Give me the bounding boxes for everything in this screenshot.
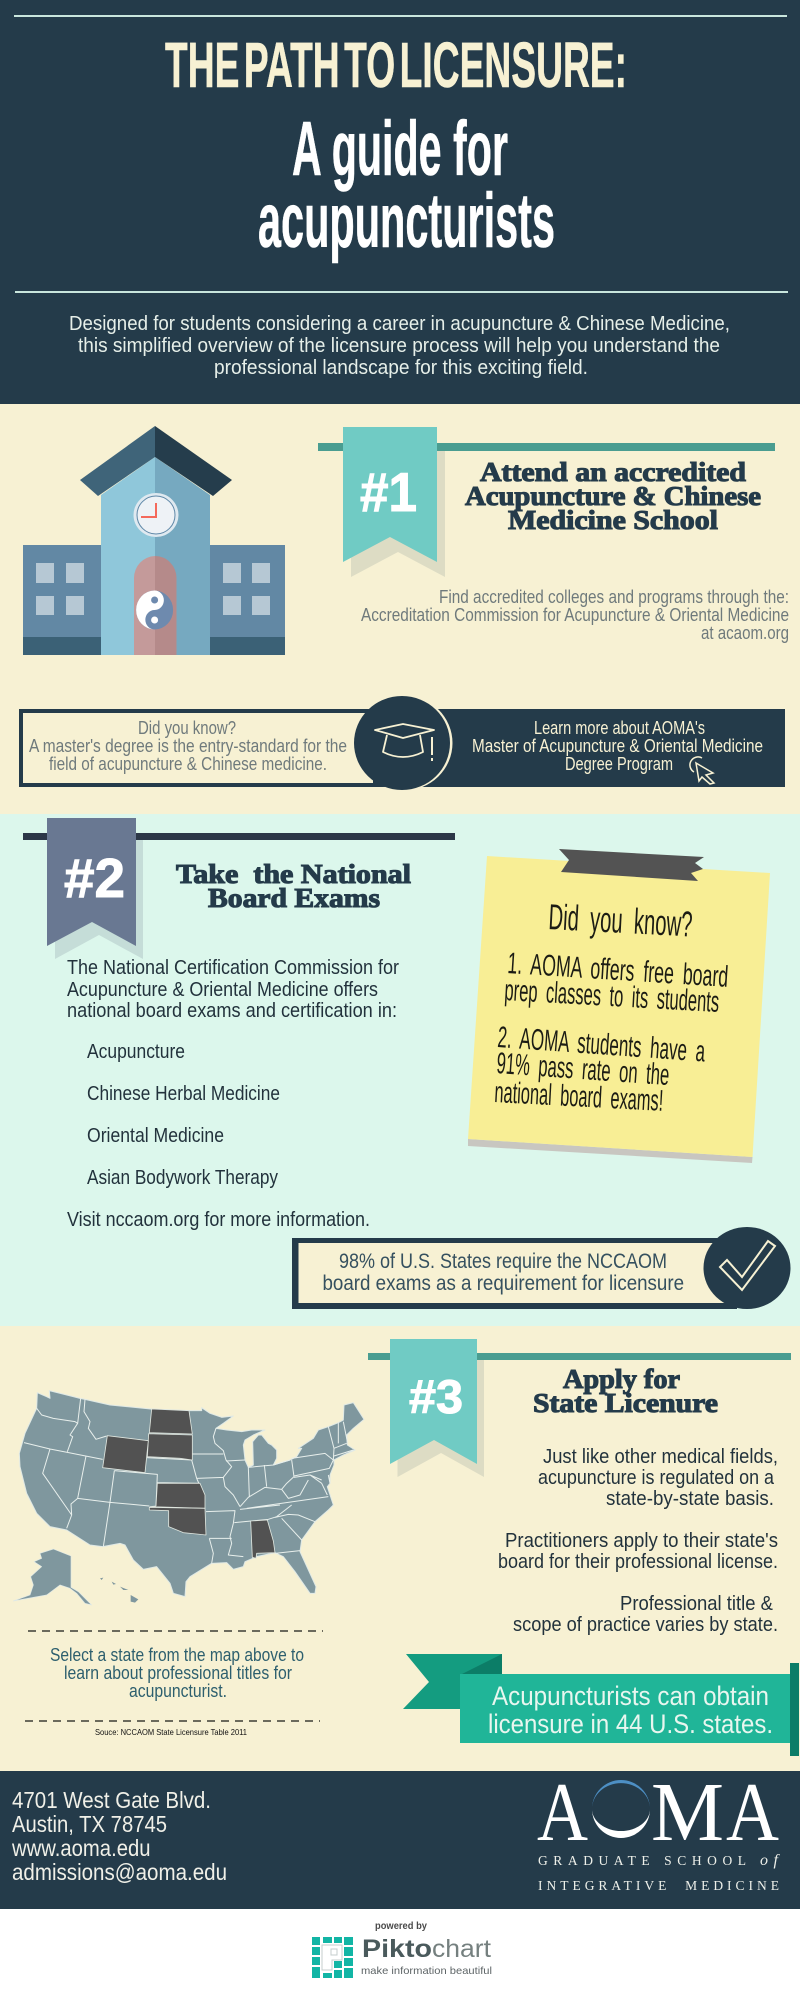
icon: graduation cap: [375, 724, 434, 761]
text: learn more: Learn more about AOMA's: [534, 717, 705, 738]
callout: did you know master's degree: [19, 696, 785, 790]
text: contact details: [11, 1787, 227, 1885]
text: contact details: admissions@aoma.edu: [12, 1859, 227, 1885]
title line 2: A guide for: [292, 106, 508, 192]
heading: step 3: State Licenure: [533, 1388, 718, 1418]
text: contact details: Austin, TX 78745: [12, 1811, 167, 1837]
panel: step 2 exams: [0, 814, 800, 1326]
callout: 98 percent: [292, 1227, 790, 1309]
text: state regulation: Professional title &: [620, 1592, 773, 1615]
handwritten text: [494, 896, 729, 1118]
text: board exams description: The National Certification Commission for: [67, 956, 399, 979]
panel: Piktochart credit: powered by: [375, 1920, 427, 1932]
callout: 98 percent: 98% of U.S. States require the NCCAOM: [339, 1250, 667, 1273]
text: board exams description: Visit nccaom.org for more information.: [67, 1208, 370, 1231]
handwritten text: 91% pass rate on the: [496, 1047, 670, 1092]
panel: footer: [0, 1766, 800, 1909]
text: map instruction: [50, 1644, 304, 1701]
text: learn more: [472, 717, 763, 774]
states highlighted on map: [103, 1409, 275, 1558]
text: state regulation: Practitioners apply to their state's: [505, 1529, 778, 1552]
text: state regulation: Just like other medical fields,: [543, 1445, 778, 1468]
callout: did you know master's degree: Did you know?: [138, 717, 236, 738]
handwritten text: national board exams!: [494, 1076, 664, 1118]
heading: step 2: Board Exams: [208, 883, 380, 913]
ribbon: step 3: [368, 1339, 791, 1477]
icon: cursor: [690, 757, 714, 784]
callout: 98 percent: board exams as a requirement for licensure: [322, 1272, 684, 1295]
icon: check mark: [720, 1241, 775, 1290]
logo: AOMA: GRADUATE SCHOOL of: [538, 1852, 781, 1869]
text: board exams description: Asian Bodywork Therapy: [87, 1166, 279, 1189]
intro text: [69, 312, 730, 379]
ribbon: step 1: [318, 427, 775, 577]
icon: Piktochart logo: [312, 1937, 353, 1978]
ribbon: step 1: #1: [360, 461, 417, 523]
text: board exams description: Chinese Herbal Medicine: [87, 1082, 280, 1105]
panel: step 3 state licensure: [0, 1326, 800, 1771]
heading: step 2: [176, 859, 412, 913]
text: contact details: 4701 West Gate Blvd.: [12, 1787, 211, 1813]
text: board exams description: Acupuncture & Oriental Medicine offers: [67, 978, 378, 1001]
logo: AOMA: INTEGRATIVE MEDICINE: [538, 1878, 779, 1893]
text: state regulation: state-by-state basis.: [606, 1487, 774, 1510]
wordmark: Piktochart: Pikto: [362, 1935, 432, 1963]
text: contact details: www.aoma.edu: [11, 1835, 151, 1861]
intro text: professional landscape for this exciting field.: [214, 356, 588, 379]
heading: step 3: [533, 1364, 718, 1418]
text: state regulation: [498, 1445, 778, 1636]
logo: AOMA: M: [651, 1766, 724, 1859]
title line 3: acupuncturists: [258, 178, 555, 264]
callout: did you know master's degree: field of acupuncture & Chinese medicine.: [49, 753, 327, 774]
wordmark: Piktochart: chart: [432, 1935, 491, 1963]
panel: Piktochart credit: [312, 1920, 492, 1978]
text: map instruction: acupuncturist.: [129, 1680, 227, 1701]
text: board exams description: Oriental Medicine: [87, 1124, 224, 1147]
heading: step 1: Attend an accredited: [480, 457, 746, 487]
banner: 44 states: licensure in 44 U.S. states.: [488, 1709, 773, 1739]
heading: step 3: Apply for: [563, 1364, 680, 1394]
ribbon: step 3: #3: [409, 1370, 463, 1423]
banner: 44 states: Acupuncturists can obtain: [492, 1681, 769, 1711]
banner: 44 states: [403, 1654, 799, 1756]
ribbon: step 2: [23, 818, 455, 959]
heading: step 1: [465, 457, 761, 535]
panel: step 1 school: [0, 404, 800, 814]
text: source: Souce: NCCAOM State Licensure Table 2011: [95, 1727, 247, 1737]
ribbon: step 2: #2: [64, 847, 125, 909]
panel: header: [0, 0, 800, 404]
logo: AOMA: A: [537, 1766, 588, 1859]
text: board exams description: national board exams and certification in:: [67, 999, 397, 1022]
heading: step 1: Acupuncture & Chinese: [465, 481, 761, 511]
wordmark: Piktochart: make information beautiful: [361, 1965, 492, 1977]
heading: step 2: Take the National: [176, 859, 412, 889]
text: map instruction: learn about professional titles for: [64, 1662, 292, 1683]
sticky note: [468, 849, 770, 1163]
heading: step 1: Medicine School: [508, 505, 719, 535]
text: learn more: Degree Program: [565, 753, 673, 774]
text: board exams description: Acupuncture: [87, 1040, 185, 1063]
text: map instruction: Select a state from the map above to: [50, 1644, 304, 1665]
text: board exams description: [67, 956, 399, 1231]
icon: school building: [23, 426, 285, 655]
intro text: Designed for students considering a career in acupuncture & Chinese Medicine,: [69, 312, 730, 335]
logo: AOMA: [537, 1766, 781, 1893]
text: accreditation: [361, 586, 789, 643]
callout: did you know master's degree: A master's degree is the entry-standard for the: [29, 735, 347, 756]
handwritten text: Did you know?: [548, 896, 694, 945]
intro text: this simplified overview of the licensure process will help you understand the: [78, 334, 720, 357]
logo: AOMA: A: [726, 1766, 779, 1859]
map: United States: [13, 1391, 364, 1605]
wordmark: Piktochart: [361, 1935, 492, 1977]
